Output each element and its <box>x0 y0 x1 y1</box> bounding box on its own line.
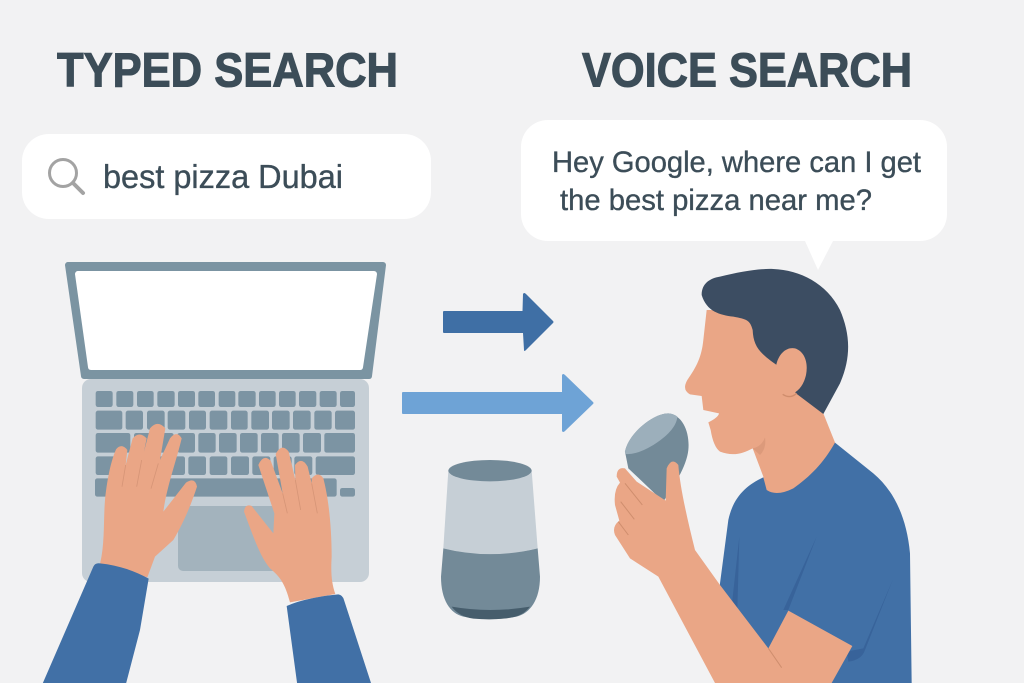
icon: smart speaker <box>441 460 540 619</box>
person speaking <box>614 269 912 683</box>
speech bubble text: the best pizza near me? <box>560 184 872 217</box>
shirt folds <box>732 537 893 662</box>
ear crease <box>783 393 797 397</box>
sleeve: left <box>42 563 149 683</box>
forearm crease <box>768 648 782 668</box>
forearm <box>658 543 852 683</box>
hand: left <box>100 424 197 577</box>
microphone device <box>625 413 689 502</box>
search query text: best pizza Dubai <box>103 158 343 195</box>
arrow: light blue <box>402 374 594 432</box>
panel: search box <box>22 134 431 219</box>
laptop base <box>82 379 369 582</box>
finger creases <box>618 483 642 535</box>
trackpad <box>178 506 288 571</box>
icon: magnifying glass <box>50 160 83 193</box>
speech bubble text: Hey Google, where can I get <box>552 146 922 179</box>
keyboard <box>95 391 355 497</box>
ear <box>776 348 807 395</box>
jaw shadow <box>753 437 765 455</box>
sleeve: right <box>287 594 372 683</box>
arrow: dark blue <box>443 293 554 351</box>
hair <box>702 269 848 414</box>
speech bubble text <box>552 146 922 217</box>
heading: voice search: VOICE SEARCH <box>582 44 912 98</box>
holding hand <box>614 462 695 580</box>
laptop lid and screen <box>68 265 383 376</box>
hand: right <box>244 448 335 602</box>
heading: typed search: TYPED SEARCH <box>57 44 398 98</box>
speech bubble <box>521 120 947 270</box>
laptop illustration <box>42 265 383 683</box>
head and neck <box>685 310 837 500</box>
t-shirt <box>715 443 912 683</box>
